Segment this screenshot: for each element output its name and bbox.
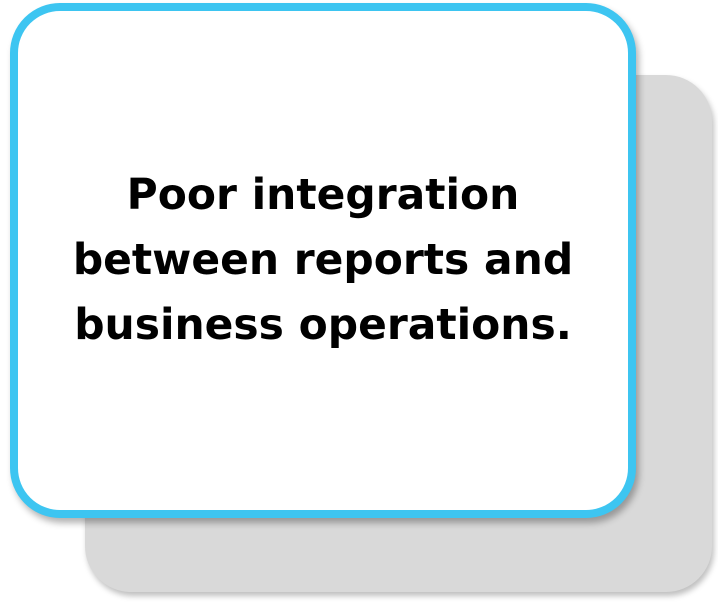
text block: main statement [73, 170, 573, 349]
text block: main statement: business operations. [74, 300, 572, 349]
text block: main statement: Poor integration [127, 170, 519, 219]
panel: front card [10, 3, 636, 518]
panel: back shadow card [85, 75, 712, 592]
text block: main statement: between reports and [73, 235, 573, 284]
